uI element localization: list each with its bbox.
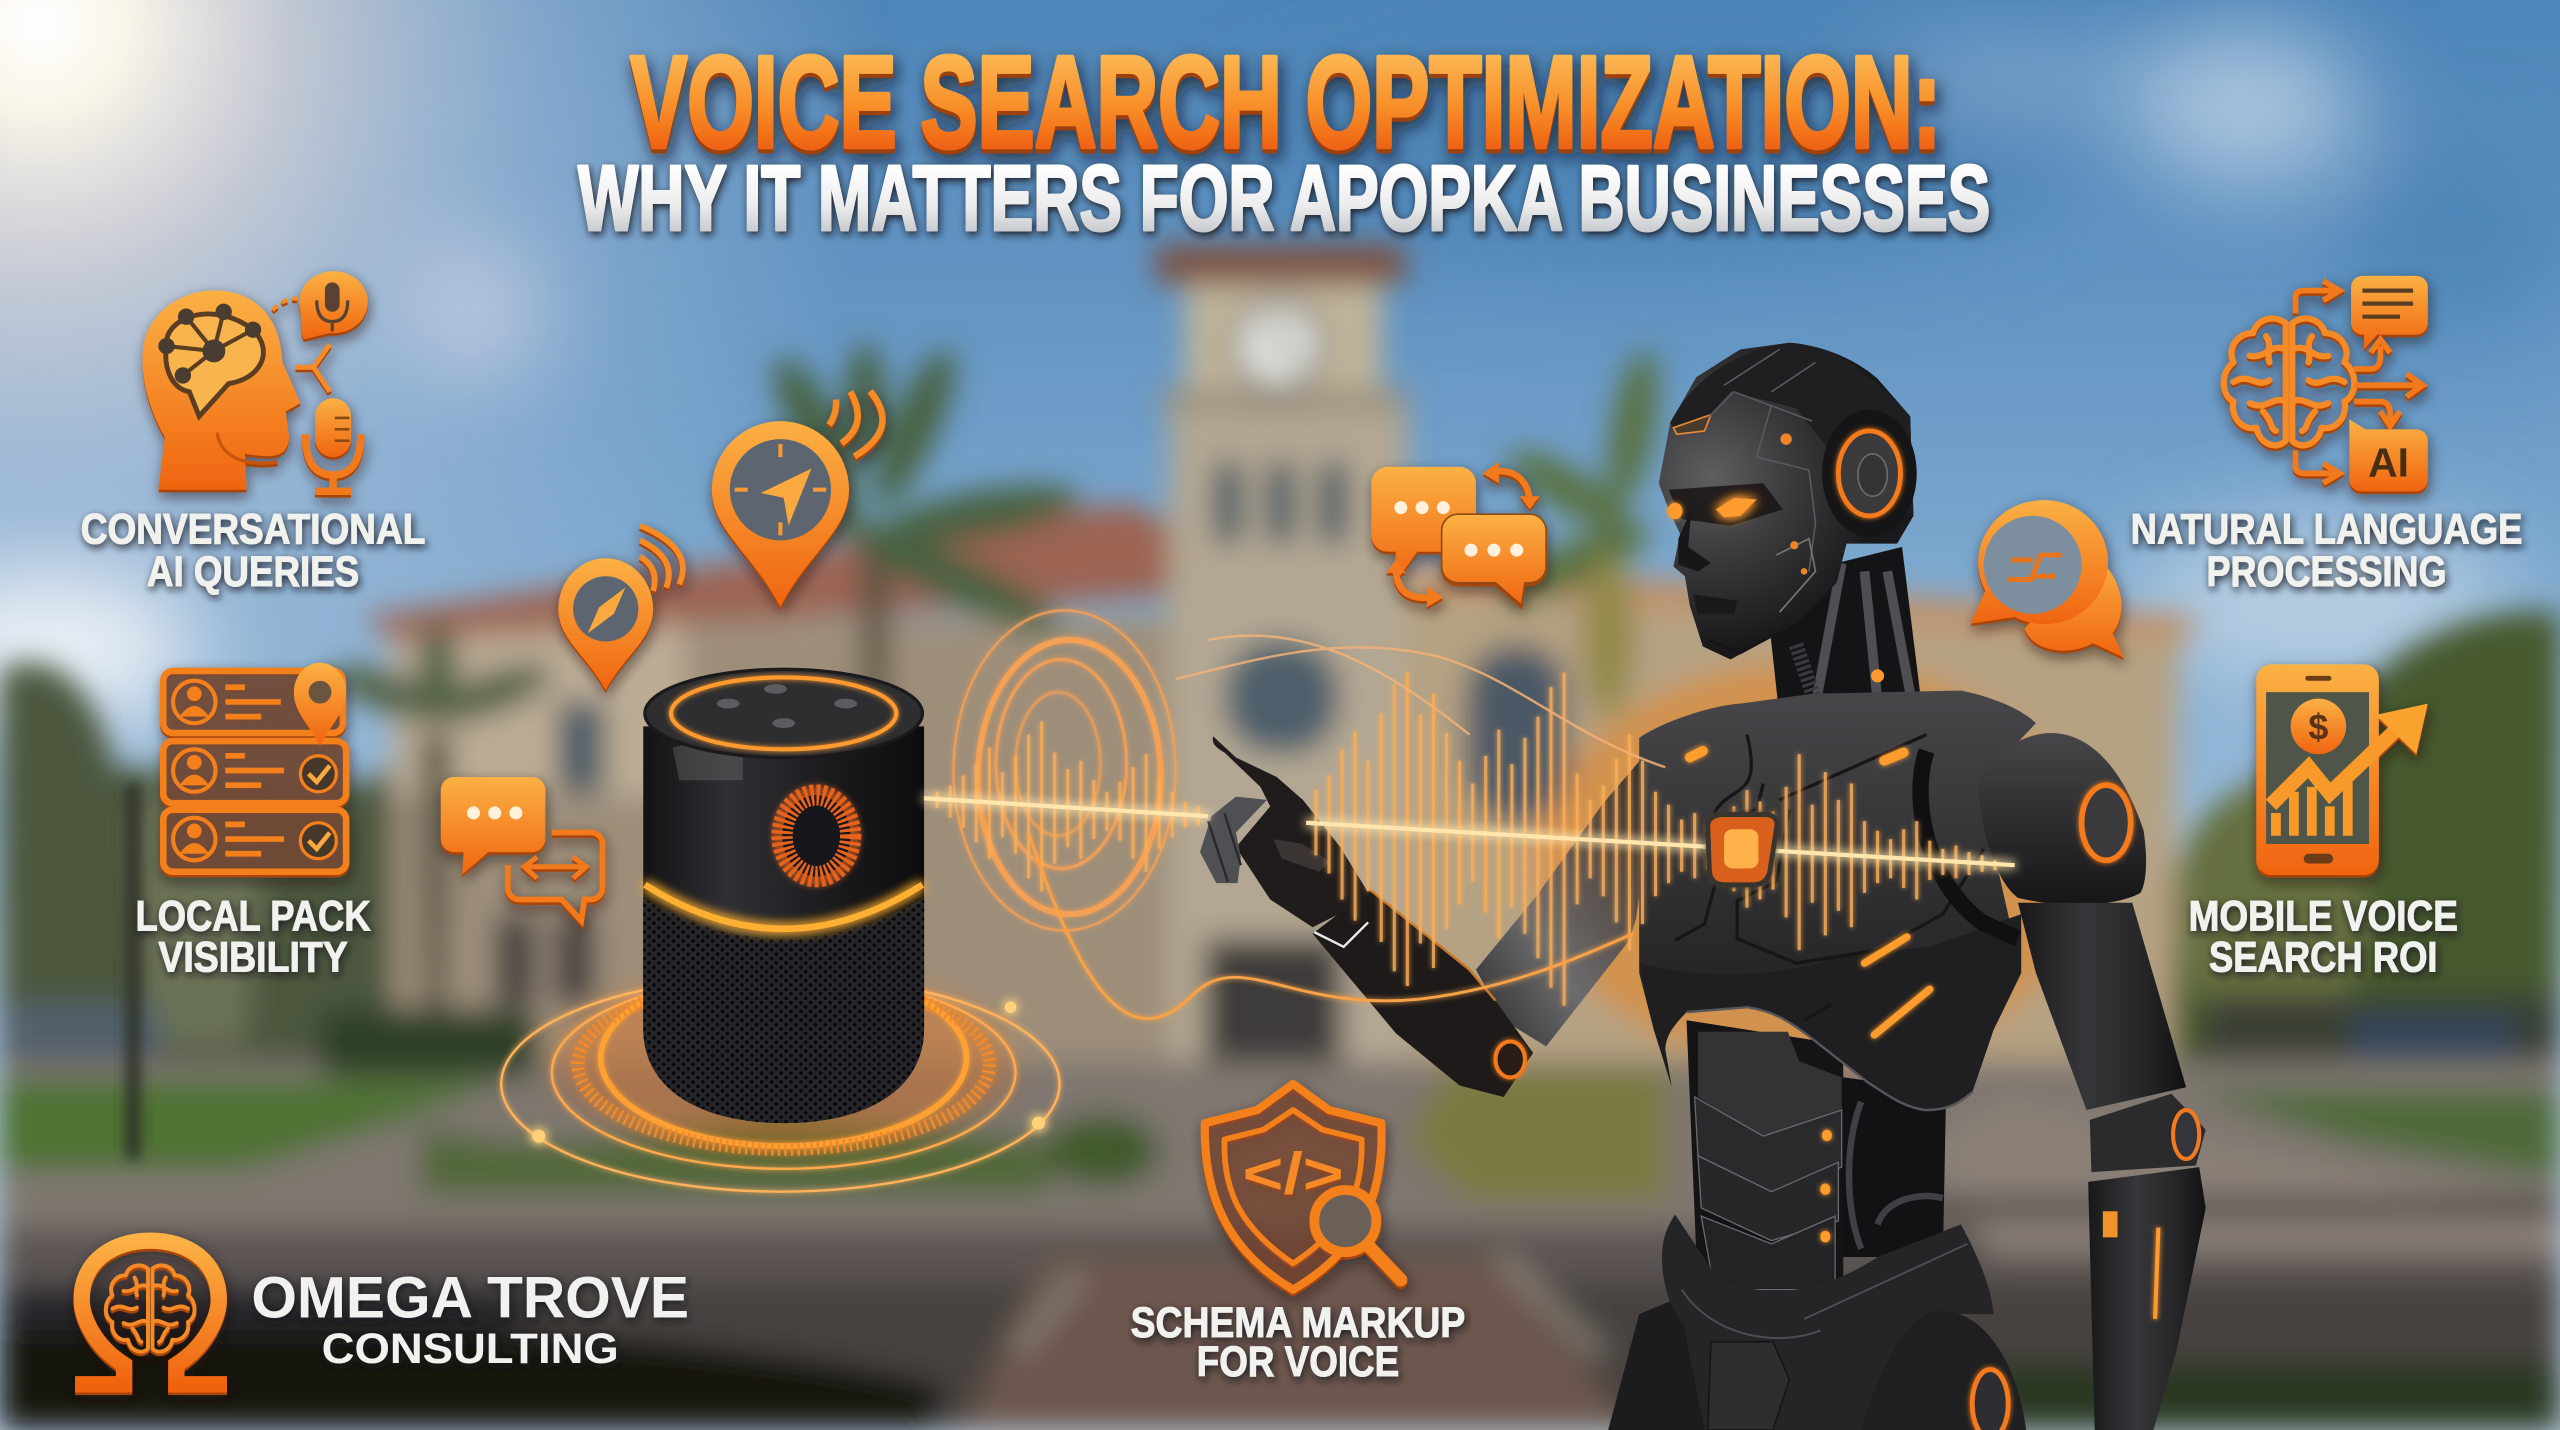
upper arm right [2018, 903, 2186, 1110]
elbow ring left [1496, 1041, 1525, 1077]
shoulder ring [2082, 785, 2131, 860]
smart speaker with glowing rings [501, 669, 1060, 1192]
sound waveform [924, 636, 2015, 1019]
icon: small location pin with signal [558, 526, 683, 691]
icon: phone with coin and growth arrow: $ [2308, 706, 2328, 747]
label: schema markup for voice [1131, 1299, 1465, 1385]
label: mobile voice search ROI: SEARCH ROI [2209, 933, 2438, 980]
right trees [2171, 611, 2560, 1094]
glowing ground rings [501, 970, 1060, 1192]
label: mobile voice search ROI: MOBILE VOICE [2189, 892, 2458, 939]
icon: brain, arrows and AI bubble [2224, 276, 2428, 491]
chest core [1708, 815, 1777, 885]
wordmark: OMEGA TROVE [251, 1265, 689, 1330]
label: natural language processing [2131, 506, 2522, 595]
label: local pack visibility: VISIBILITY [158, 933, 348, 980]
neck [1770, 547, 1923, 718]
crosswalk lines [1016, 1273, 1081, 1352]
icon: head with brain and microphones [142, 271, 368, 491]
icon: omega symbol with brain [75, 1241, 227, 1384]
palms [860, 539, 890, 1110]
robot body [1200, 343, 2206, 1430]
body glow accents [1690, 751, 1930, 1237]
left trees [0, 662, 392, 1077]
panel: local pack visibility [136, 663, 371, 980]
abdomen plates [1687, 1020, 1843, 1295]
icon: shield with code and magnifier: </> [1242, 1141, 1344, 1206]
label: natural language processing: PROCESSING [2207, 548, 2447, 595]
panel: conversational AI queries [81, 271, 425, 595]
label: schema markup for voice: SCHEMA MARKUP [1131, 1299, 1465, 1346]
icon: shield with code and magnifier [1205, 1084, 1401, 1290]
right roof [1401, 563, 2196, 640]
head [1659, 343, 1917, 659]
panel: mobile voice search ROI [2189, 664, 2458, 980]
forearm [1313, 890, 1533, 1097]
hedges [318, 1009, 539, 1077]
icon: large location pin with signal [712, 386, 886, 607]
forearm right [2088, 1167, 2206, 1430]
bottom dark lawns [0, 1321, 947, 1430]
left roof [362, 503, 1169, 640]
label: local pack visibility: LOCAL PACK [136, 892, 371, 939]
central walkway [963, 1257, 1633, 1430]
panel: natural language processing [2131, 276, 2522, 595]
elbow joint right [2090, 1094, 2206, 1172]
wordmark [251, 1265, 689, 1372]
lawns [0, 1081, 506, 1169]
label: conversational AI queries [81, 506, 425, 595]
label: schema markup for voice: FOR VOICE [1197, 1338, 1399, 1385]
icon: listing rows with pin and checks [163, 663, 346, 872]
lamp post [126, 784, 140, 1159]
icon: ring speech bubbles [1971, 500, 2124, 658]
label: conversational AI queries: CONVERSATIONAL [81, 506, 425, 553]
icon: filled and outlined chat bubbles [441, 777, 602, 921]
label: mobile voice search ROI [2189, 892, 2458, 980]
wordmark: CONSULTING [322, 1325, 619, 1372]
upper arm left [1476, 733, 1664, 1046]
title [578, 29, 1990, 250]
ground pavement [0, 1061, 2560, 1241]
left windows [558, 702, 604, 793]
panel: schema markup for voice [1131, 1084, 1465, 1385]
pelvis [1662, 1215, 1993, 1430]
sound rings [953, 611, 1176, 930]
label: local pack visibility [136, 892, 371, 980]
icon: chat bubbles with arrows [1371, 462, 1546, 607]
speaker body [643, 669, 924, 1123]
right thigh [1861, 1311, 2026, 1430]
robot [1200, 343, 2206, 1430]
chest [1639, 691, 2036, 1110]
icon: brain, arrows and AI bubble: AI [2368, 440, 2409, 486]
logo: Omega Trove Consulting [75, 1241, 689, 1384]
shoulder [1979, 733, 2146, 905]
building walls [392, 617, 1176, 1066]
left thigh and abdomen spine [1608, 1290, 1731, 1430]
label: conversational AI queries: AI QUERIES [147, 548, 359, 595]
tower [1169, 400, 1407, 1118]
hand [1200, 736, 1371, 947]
icon: phone with coin and growth arrow [2256, 664, 2428, 875]
